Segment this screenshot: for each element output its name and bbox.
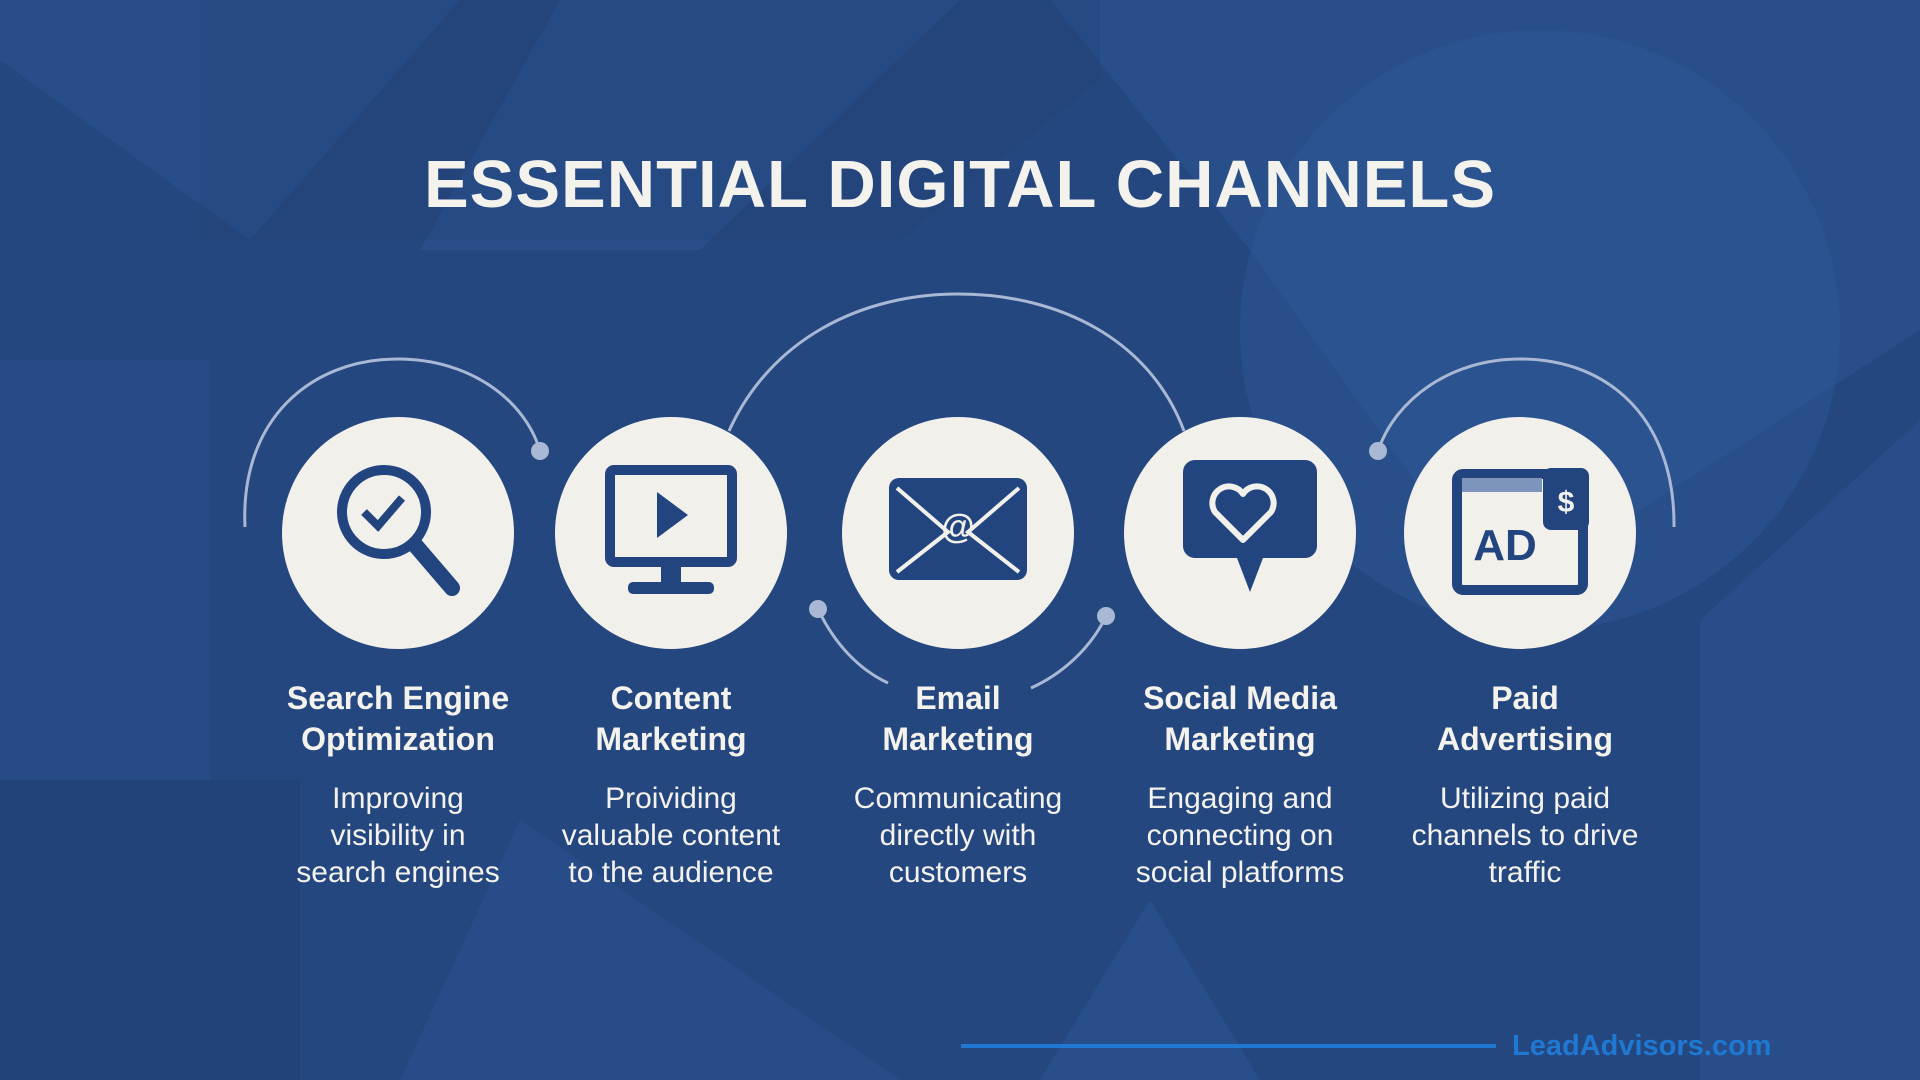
column: social: Social Media xyxy=(1143,680,1337,716)
column: paid xyxy=(1412,680,1638,889)
icon: monitor xyxy=(555,417,787,649)
column: SEO: Search Engine xyxy=(287,680,509,716)
column: social: Marketing xyxy=(1164,721,1316,757)
column: email: directly with xyxy=(880,819,1036,852)
column: social xyxy=(1136,680,1344,889)
column: email xyxy=(854,680,1062,889)
column: email: Email xyxy=(915,680,1001,716)
column: content: Marketing xyxy=(595,721,747,757)
column: paid: Paid xyxy=(1491,680,1559,716)
column: paid: traffic xyxy=(1489,856,1561,889)
footer line xyxy=(961,1044,1496,1048)
column: email: Marketing xyxy=(882,721,1034,757)
icon: ad: $ xyxy=(1558,486,1575,519)
column: paid: Utilizing paid xyxy=(1440,782,1610,815)
icon: email: @ xyxy=(941,508,975,546)
column: SEO: search engines xyxy=(296,856,500,889)
icon: social xyxy=(1124,417,1356,649)
column: content: valuable content xyxy=(562,819,780,852)
column: content xyxy=(562,680,780,889)
column: SEO xyxy=(287,680,509,889)
column: social: connecting on xyxy=(1147,819,1333,852)
column: content: to the audience xyxy=(568,856,774,889)
icon: ad xyxy=(1404,417,1636,649)
column: SEO: Improving xyxy=(332,782,464,815)
icon: search xyxy=(282,417,514,649)
icon: ad: AD xyxy=(1473,521,1537,570)
column: SEO: visibility in xyxy=(330,819,466,852)
title: ESSENTIAL DIGITAL CHANNELS xyxy=(424,147,1496,222)
column: content: Content xyxy=(611,680,731,716)
column: paid: Advertising xyxy=(1437,721,1613,757)
column: content: Proividing xyxy=(605,782,737,815)
brand: LeadAdvisors.com xyxy=(1512,1030,1771,1062)
column: email: customers xyxy=(889,856,1027,889)
icon: email xyxy=(842,417,1074,649)
column: SEO: Optimization xyxy=(301,721,495,757)
column: email: Communicating xyxy=(854,782,1062,815)
column: paid: channels to drive xyxy=(1412,819,1638,852)
column: social: Engaging and xyxy=(1147,782,1333,815)
column: social: social platforms xyxy=(1136,856,1344,889)
